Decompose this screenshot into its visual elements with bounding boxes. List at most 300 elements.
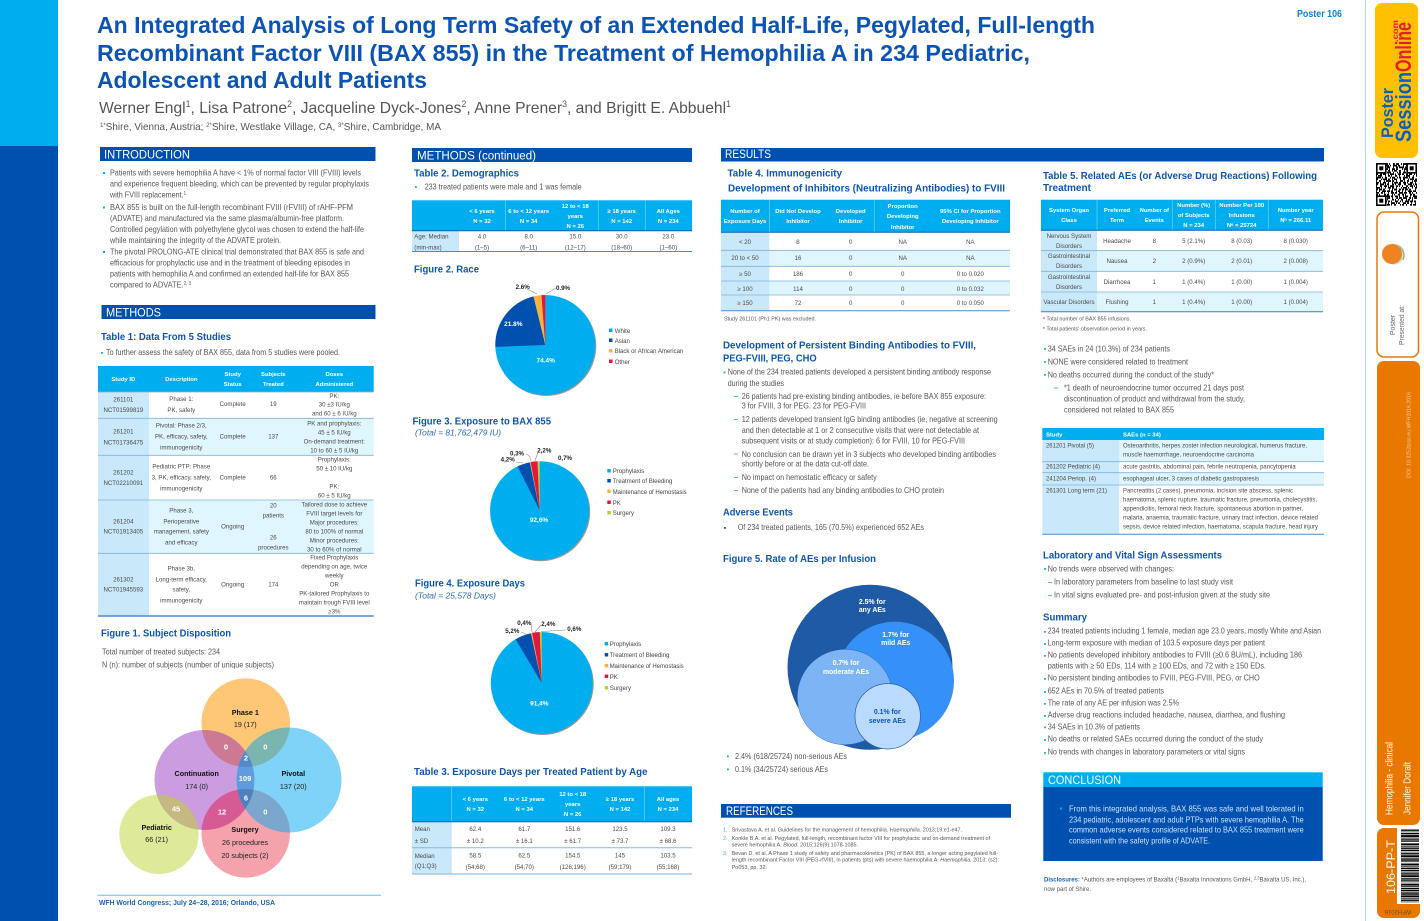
text block: introduction bullets: Patients with severe hemophilia A have < 1% of normal factor VIII (FVIII) levels [110,168,361,178]
authors: , and Brigitt E. Abbuehl [567,100,726,117]
table 1: immunogenicity [160,445,203,452]
text block: summary bullets: 34 SAEs in 10.3% of patients [1048,721,1140,731]
table 1: 80 to 100% of normal [305,529,363,536]
left colour band [0,0,58,921]
text block: reference list: 3. [723,851,728,857]
table 3: < 6 years [463,797,489,803]
panel: methods continued [412,148,692,252]
disclosures: Baxalta US, Inc.), [1260,877,1306,884]
table 5: 1 (0.00) [1231,279,1252,286]
table 1: NCT02210091 [103,480,144,487]
authors: , Lisa Patrone [191,100,287,117]
heading: table 2: Table 2. Demographics [414,169,519,180]
table 1: 261204 [113,518,134,525]
table 4: NA [966,255,975,262]
table 3: N = 34 [516,807,534,813]
heading: table 3: Table 3. Exposure Days per Treated Patient by Age [414,767,648,778]
table 5: 1 (0.004) [1284,279,1308,286]
nested circle chart: rate of AEs: mild AEs [881,640,910,647]
heading: laboratory and vital sign assessments: Laboratory and Vital Sign Assessments [1043,551,1222,562]
panel: methods [98,305,376,616]
text block: binding antibody findings: 12 patients developed transient IgG binding antibodies (ie, negative at screening [742,414,998,424]
authors: , Jacqueline Dyck-Jones [292,100,462,117]
table 1: depending on age, twice [301,564,368,571]
heading: methods [102,305,376,320]
table 2: N = 142 [611,219,633,225]
pie chart: race: 21.8% [504,321,523,328]
text block: reference list: Po053, pp. 32. [732,865,767,871]
table 3: 58.5 [469,852,482,860]
text block: introduction bullets: efficacious for prophylactic use and in the treatment of bleeding episodes in [110,258,350,268]
table 1: Pediatric PTP: Phase [152,464,211,471]
footnote: table 4: Study 261101 (Ph1 PK) was excluded. [724,317,816,323]
table: SAEs by study: esophageal ulcer, 3 cases of diabetic gastroparesis [1123,476,1259,483]
heading: table 1: Table 1: Data From 5 Studies [101,332,231,343]
table 1: Administered [315,382,354,388]
table 1: Treated [263,382,284,388]
legend: exposure: Surgery [613,510,635,517]
table 4: Inhibitor [786,219,810,225]
venn diagram: 45 [172,805,180,814]
logo: PosterSessionOnline: Session [1391,72,1416,142]
text block: binding antibody findings: 26 patients had pre-existing binding antibodies, ie before BAX 855 exposure: [742,391,986,401]
nested circle chart: rate of AEs [788,585,954,750]
table 3: 61.7 [518,826,531,833]
table 4: 0 to 0.032 [957,286,984,293]
table 4: ≥ 100 [737,286,753,293]
table 1: 60 ± 5 IU/kg [318,493,351,500]
heading: summary: Summary [1043,613,1087,624]
subtitle: figure 4 total: (Total = 25,578 Days) [415,591,496,601]
venn diagram: 137 (20) [280,782,307,791]
disclosures: Baxalta Innovations GmbH, [1179,877,1254,884]
text block: laboratory findings: In laboratory parameters from baseline to last study visit [1054,577,1234,587]
table 2: 15.0 [569,234,582,240]
table 1: Status [224,382,242,388]
table 3: ± 10.2 [467,838,484,845]
title: Recombinant Factor VIII (BAX 855) in the Treatment of Hemophilia A in 234 Pediatric, [97,40,1030,66]
table 5: Events [1145,218,1165,224]
table 4: 72 [795,300,802,307]
legend: race: Black or African American [615,348,683,355]
text block: reference list: 1. [723,828,728,834]
table 5: Number Per 100 [1219,203,1265,209]
nested circle chart: rate of AEs: 2.5% for [859,599,886,606]
text block: binding antibody findings: None of the patients had any binding antibodies to CHO protein [742,485,944,495]
table 4: 114 [793,286,803,293]
sidebar divider [1364,0,1366,921]
table 2: 23.0 [662,234,675,240]
table 1: 20 [270,502,277,509]
subtitle: figure 3 total: (Total = 81,762,479 IU) [415,427,501,437]
table 3: N = 32 [467,807,485,813]
venn diagram: 109 [239,774,251,783]
text block: summary bullets: Long-term exposure with median of 103.5 exposure days per patient [1048,638,1266,648]
pie chart: exposure [490,448,590,561]
table: SAEs by study [1042,428,1324,534]
table 4: Developing [887,214,919,220]
table 3: (126;196) [560,864,586,871]
text block: reference list [723,828,999,871]
text block: SAE bullets: considered not related to BAX 855 [1064,405,1174,415]
text: conclusion statement: common adverse events considered related to BAX 855 treatment were [1069,825,1304,835]
table: SAEs by study: haematoma, splenic rupture, traumatic fracture, pneumonia, cholecystitis, [1123,497,1317,504]
pie chart: exposure: 92,6% [530,517,548,524]
authors: 1 [186,99,191,109]
text block: laboratory findings: No trends were observed with changes: [1048,564,1174,574]
legend: exposure days: PK [610,674,618,681]
text block: introduction bullets: while maintaining the integrity of the ADVATE protein. [109,235,281,245]
table 1: 66 [270,474,277,481]
table 3: N = 142 [610,807,631,813]
table 5: Nᵃ = 25724 [1227,223,1257,229]
text block: binding antibody findings: subsequent visits or at study completion): 6 for FVIII, 10 for PEG-FVIII [742,436,965,446]
table: SAEs by study: Study [1046,432,1063,438]
footnotes: table 5: ᵃ Total number of BAX 855 infusions. [1043,316,1131,322]
text block: binding antibody findings: during the studies [728,378,784,388]
table: SAEs by study: SAEs (n = 34) [1123,432,1161,438]
table 5: Infusions [1229,213,1256,219]
pie chart: exposure days [491,620,594,735]
table 1: Doses [325,372,344,378]
table 4: Developed [836,209,866,215]
text block: reference list: Konkle B.A. et al. Pegylated, full-length, recombinant factor VIII for prophylactic and on-demand treatment of [732,836,990,842]
table 1: ≥3% [328,609,341,616]
table 3: ± 16.1 [516,838,533,845]
pie chart: race: 2.6% [516,284,530,291]
table 2: (12–17) [565,244,586,252]
text: presented at: Poster [1390,314,1397,335]
authors: 2 [287,99,292,109]
table 3: years [565,802,581,808]
heading: introduction: INTRODUCTION [104,150,190,162]
text block: summary bullets [1044,626,1321,757]
table 2: N = 34 [520,219,538,225]
table: SAEs by study: malaria, anaemia, traumatic fracture, urinary tract infection, device related [1123,515,1318,522]
table 5: Diarrhoea [1104,279,1131,286]
table 4: NA [898,239,908,246]
table 1: NCT01945593 [103,586,144,593]
table 5: 2 (0.9%) [1182,258,1205,265]
table 1: Ongoing [221,523,244,530]
table 2: N = 32 [473,219,491,225]
panel: figure 4 exposure days [415,579,684,735]
table 5: Disorders [1056,243,1082,250]
text: topic and author: Hemophilia - clinical [1384,742,1396,815]
table 2: 12 to < 18 [562,204,590,210]
text block: introduction bullets: compared to ADVATE. [110,280,193,290]
panel: figure 1 subject disposition [101,629,342,878]
table 2: All Ages [657,209,681,215]
table 1: Description [165,377,198,383]
text block: SAE bullets [1044,344,1245,415]
text block: introduction bullets: 2, 3 [184,281,191,287]
table 5: 1 [1153,299,1157,306]
footer: congress: WFH World Congress; July 24–28, 2016; Orlando, USA [99,898,275,907]
table 2: (min-max) [414,244,442,252]
table: SAEs by study: appendicitis, femoral neck fracture, spontaneous abortion in partner, [1123,506,1303,513]
table 4: 0 [901,271,905,278]
table 1: 26 [270,534,277,541]
disclosures: Disclosures: *Authors are employees of Baxalta ( [1044,877,1187,884]
table 1: Fixed Prophylaxis [310,555,358,562]
table 1: Ongoing [221,582,244,589]
text: conclusion statement: consistent with the safety profile of ADVATE. [1069,836,1210,846]
table 4: 0 [901,300,905,307]
table: SAEs by study: 241204 Periop. (4) [1046,476,1096,483]
text block: introduction bullets: 1 [184,191,186,197]
table 1: 3, PK, efficacy, safety, [152,475,211,482]
table 5: 8 [1153,238,1157,245]
legend: race: Asian [615,338,630,345]
text block: SAE bullets: discontinuation of product and withdrawal from the study, [1064,394,1245,404]
affiliations: Shire, Westlake Village, CA, [212,121,338,133]
table 2 [412,200,692,252]
table 1: Long-term efficacy, [156,577,207,584]
heading: table 5: Treatment [1043,183,1092,194]
table 1: 30 ±3 IU/kg [319,402,350,409]
text block: summary bullets: The rate of any AE per infusion was 2.5% [1048,698,1179,708]
text block: SAE bullets: *1 death of neuroendocrine tumor occurred 21 days post [1064,382,1245,392]
text block: introduction bullets: with FVIII replacement. [110,190,196,200]
table 5: Disorders [1056,263,1082,270]
table 1: PK: [329,483,340,490]
venn diagram: 19 (17) [234,720,257,729]
panel: table 5 and serious adverse events [1041,171,1324,534]
table 1: safety, [173,586,190,593]
table 1: 45 ± 5 IU/kg [318,429,351,436]
heading: references [721,804,1011,818]
table 1: Complete [220,401,246,408]
table 5: 2 [1153,258,1157,265]
table 3: N = 234 [658,807,679,813]
footnotes: table 5: ᵇ Total patients' observation period in years. [1043,327,1147,333]
text block: summary bullets: 652 AEs in 70.5% of treated patients [1048,686,1164,696]
text: poster code: 106-PP-T [1384,839,1398,894]
table 1: On-demand treatment: [304,438,365,445]
heading: adverse events: Adverse Events [723,508,793,519]
table 3: All ages [657,797,680,803]
table 2: 4.0 [478,234,487,240]
heading: persistent binding antibodies: Development of Persistent Binding Antibodies to FVIII, [723,341,976,352]
panel: summary [1043,613,1321,757]
table 5: 1 (0.00) [1231,299,1252,306]
table: SAEs by study: 261201 Pivotal (5) [1046,442,1094,449]
venn diagram: 0 [263,743,267,752]
disclosures: now part of Shire. [1044,886,1091,893]
legend: race: White [615,328,631,335]
table: SAEs by study: acute gastritis, abdominal pain, febrile neutropenia, pancytopenia [1123,464,1296,471]
table 1: Pivotal: Phase 2/3, [156,422,207,429]
table 4: Inhibitor [891,225,915,231]
table 3: 103.5 [660,852,676,860]
table 1: immunogenicity [160,486,203,493]
text: table 2 note: 233 treated patients were male and 1 was female [425,182,582,192]
text block: binding antibody findings: 3 for FVIII, 3 for PEG. 23 for PEG-FVIII [742,400,866,410]
table 1: PK: [329,393,340,400]
text block: introduction bullets: and experience frequent bleeding, which can be prevented by regular prophylaxis [110,178,369,188]
table 1: PK-tailored Prophylaxis to [299,591,370,598]
table 3: Mean [415,826,430,833]
text block: binding antibody findings [724,367,998,495]
table: SAEs by study: muscle haemorrhage, neuroendocrine carcinoma [1123,452,1255,459]
legend: exposure days: Surgery [610,685,632,692]
table 3: ± 61.7 [564,838,582,845]
text block: SAE bullets: NONE were considered related to treatment [1048,357,1189,367]
table 5: Preferred [1104,208,1130,214]
text: presented at: Presented at: [1399,305,1406,345]
text block: summary bullets: No deaths or related SAEs occurred during the conduct of the study [1048,734,1264,744]
table 3: ± 73.7 [612,838,629,845]
table 4: 95% CI for Proportion [940,209,1001,215]
table 4: 0 to 0.050 [957,300,984,307]
table 4: ≥ 50 [739,271,752,278]
legend: exposure days [605,641,684,692]
legend: race: Other [615,359,630,366]
table 5: 2 (0.008) [1284,258,1308,265]
heading: table 4: Table 4. Immunogenicity [728,169,842,180]
table 1: FVIII target levels for [306,511,362,518]
panel: introduction [100,147,376,290]
table 1: 10 to 60 ± 5 IU/kg [310,447,358,454]
venn diagram: 0 [263,808,267,817]
legend: exposure days: Prophylaxis [610,641,641,648]
text block: summary bullets: No patients developed inhibitory antibodies to FVIII (≥0.6 BU/mL), including 186 [1048,650,1302,660]
panel: figure 2 race [414,265,683,396]
table 4: Proportion [888,204,918,210]
table 2: 6 to < 12 years [508,209,550,215]
nested circle chart: rate of AEs: any AEs [859,607,886,614]
venn diagram: Pivotal [282,769,305,778]
pie chart: exposure days: 91,4% [530,700,549,708]
table 3: 145 [615,852,626,860]
text block: reference list: severe hemophilia A. Blood. 2015;126(9):1078-1085. [732,843,858,849]
table 5: Nervous System [1047,233,1091,240]
heading: table 4: Development of Inhibitors (Neutralizing Antibodies) to FVIII [728,184,1005,195]
icon: QR code [1376,163,1417,206]
table 3: (54;68) [466,864,485,871]
table 4: 0 [849,271,853,278]
table 3: 123.5 [612,826,628,833]
table 4: 186 [793,271,804,278]
table: SAEs by study: 261301 Long term (21) [1046,488,1107,495]
table 1: Subjects [261,372,286,378]
nested circle chart: rate of AEs: moderate AEs [823,669,869,676]
text block: reference list: Bevan D. et al. A Phase 1 study of safety and pharmacokinetics (PK) of BAX 855, a longer acting pegylated full- [732,851,998,857]
table 1: 261201 [113,428,134,435]
table 1: 30 to 60% of normal [307,547,362,554]
text block: binding antibody findings: shortly before or at the data cut-off date. [742,459,869,469]
panel: results [721,148,1324,774]
table: SAEs by study: Osteoarthritis, herpes zoster infection neurological, humerus fracture, [1123,442,1307,449]
table 4: 0 to 0.020 [957,271,984,278]
table 4: 20 to < 50 [731,255,759,262]
table 5: Number of [1140,208,1169,214]
table 3: 109.3 [660,826,676,833]
text block: laboratory findings [1044,564,1270,600]
table 1: Phase 3b, [168,566,195,573]
text block: introduction bullets: BAX 855 is built on the full-length recombinant FVIII (rFVIII) of rAHF-PFM [110,202,353,212]
text block: summary bullets: No persistent binding antibodies to FVIII, PEG-FVIII, PEG, or CHO [1048,673,1260,683]
heading: persistent binding antibodies [723,341,976,365]
text block: binding antibody findings: No conclusion can be drawn yet in 3 subjects who developed binding antibodies [742,449,996,459]
authors: 3 [562,99,567,109]
table 5: System Organ [1049,208,1089,214]
pie chart: exposure days: 5,2% [505,628,520,635]
table 4: Did Not Develop [775,209,821,215]
table 5: 8 (0.03) [1231,238,1252,245]
legend: exposure days: Maintenance of Hemostasis [610,663,684,670]
text block: SAE bullets: 34 SAEs in 24 (10.3%) of 234 patients [1048,344,1170,354]
table 4 [721,200,1010,311]
authors: 2 [462,99,466,109]
table 3: Median [415,853,435,860]
table 5: Flushing [1105,299,1129,306]
table 4: 16 [795,255,802,262]
table 5 [1041,200,1323,312]
text block: introduction bullets: (ADVATE) and manufactured via the same plasma/albumin-free platform. [110,213,344,223]
table 5: 8 (0.030) [1284,238,1308,245]
panel: table 3 [412,767,692,874]
table 4: 0 [849,255,853,262]
table 1: 261202 [113,469,134,476]
table: SAEs by study: Pancreatitis (2 cases), pneumonia, incision site abscess, splenic [1123,488,1293,495]
table 1: Complete [220,433,246,440]
venn diagram: 2 [244,754,248,763]
affiliations: 2* [206,122,212,129]
title: Adolescent and Adult Patients [97,67,427,93]
authors: , Anne Prener [466,100,563,117]
table 1 [98,366,374,616]
heading: table 5 [1043,171,1317,194]
text: AE rate bullets [727,751,847,774]
text block: binding antibody findings: No impact on hemostatic efficacy or safety [742,472,877,482]
text: topic and author: Jennifer Doralt [1402,762,1414,815]
table: SAEs by study: sepsis, device related infection, haematoma, scapula fracture, head injury [1123,524,1319,531]
table 4: 0 [849,286,853,293]
table 1: and efficacy [165,539,198,546]
pie chart: exposure days: 0,6% [567,626,582,633]
table 1: Prophylaxis: [318,457,351,464]
table 2: Age: Median [414,234,449,240]
venn diagram: 174 (0) [185,782,208,791]
table 1: Phase 3, [169,507,194,514]
venn diagram: Pediatric [142,823,172,832]
table 1: immunogenicity [160,598,203,605]
table 3: (59;179) [609,864,631,871]
venn diagram: 12 [218,808,226,817]
table 5: Gastrointestinal [1048,274,1090,281]
heading: results [721,148,1324,162]
heading: methods continued: METHODS (continued) [417,150,536,162]
panel: topic bar [1377,361,1420,825]
table 1: Study [225,372,242,378]
text block: binding antibody findings: and then detectable at 1 or 2 consecutive visits that were not detectable at [742,425,980,435]
table: SAEs by study: 261202 Pediatric (4) [1046,464,1100,471]
table 1: PK, efficacy, safety, [155,434,208,441]
table 3: ≥ 18 years [606,797,635,803]
logo: PosterSessionOnline: Online [1391,22,1416,72]
text: DOI: DOI: 10.3252/pso.eu.WFH2016.2016 [1406,392,1412,478]
panel: figure 3 exposure [412,417,687,561]
table 5: Term [1110,218,1124,224]
heading: figure 1: Figure 1. Subject Disposition [101,629,231,640]
pie chart: race [495,284,596,396]
text: figure 1 notes: N (n): number of subjects (number of unique subjects) [102,660,274,670]
disclosures: 2,3 [1254,876,1260,881]
table 2: N = 234 [658,219,679,225]
table 5: 5 (2.1%) [1182,238,1205,245]
